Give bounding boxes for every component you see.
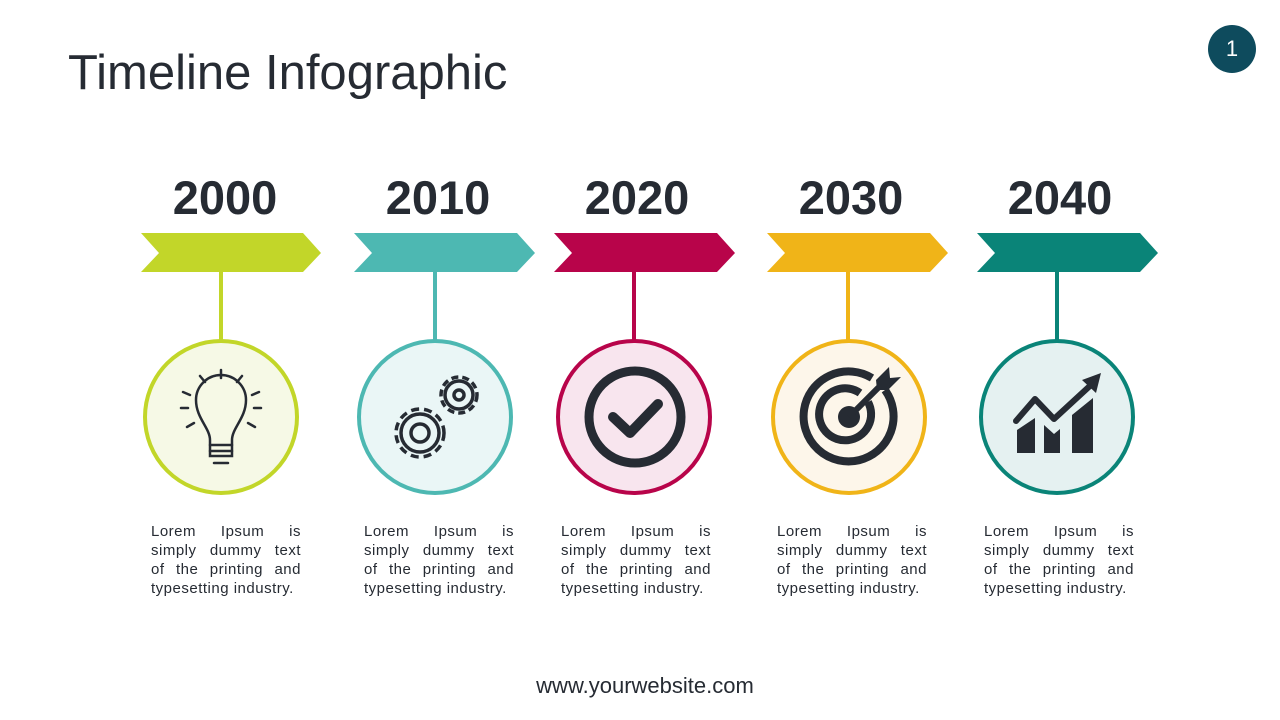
year 2030: 2030 [799, 171, 903, 224]
page badge [1208, 25, 1256, 73]
text 3: simply dummy text [561, 542, 711, 559]
text 5: Lorem Ipsum is [984, 523, 1134, 540]
step 1: arrow, line, circle, bulb icon [141, 233, 321, 493]
step 2: arrow, line, circle, gears icon [354, 233, 535, 493]
text 2: of the printing and [364, 561, 514, 578]
text 5: of the printing and [984, 561, 1134, 578]
text 2 [364, 523, 514, 597]
text 1: typesetting industry. [151, 580, 294, 597]
text 5: typesetting industry. [984, 580, 1127, 597]
year 2020: 2020 [585, 171, 689, 224]
text 4 [777, 523, 927, 597]
text 3: typesetting industry. [561, 580, 704, 597]
page badge: 1 [1226, 36, 1238, 61]
text 4: Lorem Ipsum is [777, 523, 927, 540]
text 5: simply dummy text [984, 542, 1134, 559]
year 2000: 2000 [173, 171, 277, 224]
text 2: simply dummy text [364, 542, 514, 559]
text 3 [561, 523, 711, 597]
step 3: arrow, line, circle, check icon [554, 233, 735, 493]
text 3: Lorem Ipsum is [561, 523, 711, 540]
text 4: typesetting industry. [777, 580, 920, 597]
text 5 [984, 523, 1134, 597]
title: Timeline Infographic [68, 46, 507, 100]
footer: www.yourwebsite.com [536, 673, 754, 698]
text 1: of the printing and [151, 561, 301, 578]
text 2: Lorem Ipsum is [364, 523, 514, 540]
text 3: of the printing and [561, 561, 711, 578]
step 5: arrow, line, circle, growth chart icon [977, 233, 1158, 493]
text 4: simply dummy text [777, 542, 927, 559]
text 2: typesetting industry. [364, 580, 507, 597]
year 2040: 2040 [1008, 171, 1112, 224]
text 1: Lorem Ipsum is [151, 523, 301, 540]
text 1: simply dummy text [151, 542, 301, 559]
year 2010: 2010 [386, 171, 490, 224]
text 4: of the printing and [777, 561, 927, 578]
step 4: arrow, line, circle, target icon [767, 233, 948, 493]
text 1 [151, 523, 301, 597]
